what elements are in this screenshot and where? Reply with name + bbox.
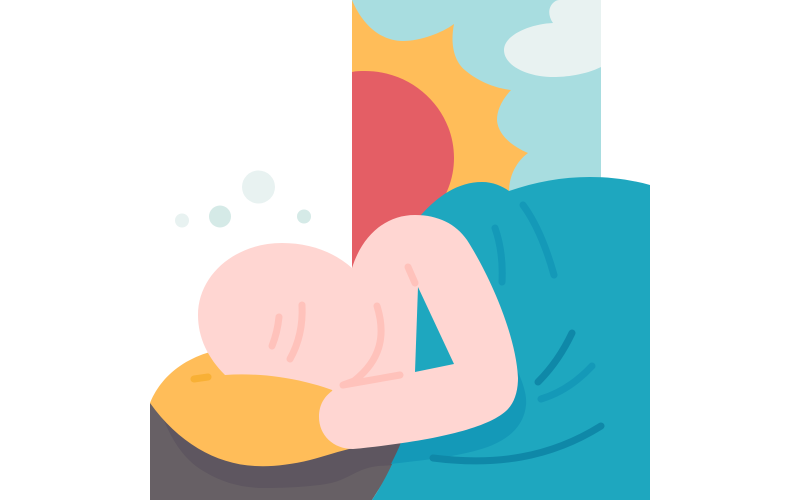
torso and arm bbox=[319, 215, 518, 449]
blanket fold: middle light bbox=[541, 366, 592, 399]
thought bubbles bbox=[175, 170, 311, 228]
pillow body bbox=[150, 352, 353, 466]
blanket fold: upper left bbox=[495, 228, 502, 282]
pillow bbox=[150, 352, 353, 466]
blanket fold: upper right bbox=[523, 205, 554, 275]
blanket fold: middle dark bbox=[538, 333, 572, 382]
bubble: large bbox=[242, 170, 275, 204]
icon: cloud bbox=[504, 0, 601, 77]
bubble: small right bbox=[297, 210, 311, 224]
eye crease: short bbox=[272, 317, 279, 346]
pillow highlight bbox=[194, 377, 208, 379]
person bbox=[198, 215, 518, 449]
head bbox=[198, 243, 400, 395]
blanket arm shadow bbox=[391, 368, 526, 464]
chest crease bbox=[343, 306, 400, 385]
bubble: small left bbox=[175, 214, 189, 228]
blanket bbox=[372, 177, 650, 500]
armpit crease bbox=[408, 267, 415, 283]
eye crease: long bbox=[290, 305, 302, 359]
blanket body bbox=[372, 177, 650, 500]
mattress base bbox=[150, 403, 410, 500]
arm gap bbox=[415, 287, 454, 372]
panel: sky window bbox=[352, 0, 601, 200]
icon: sun disc bbox=[352, 71, 454, 290]
mattress shadow bbox=[160, 410, 410, 488]
icon: sun rays bbox=[352, 0, 528, 290]
bubble: medium bbox=[209, 206, 231, 228]
blanket fold: bottom bbox=[433, 426, 601, 461]
